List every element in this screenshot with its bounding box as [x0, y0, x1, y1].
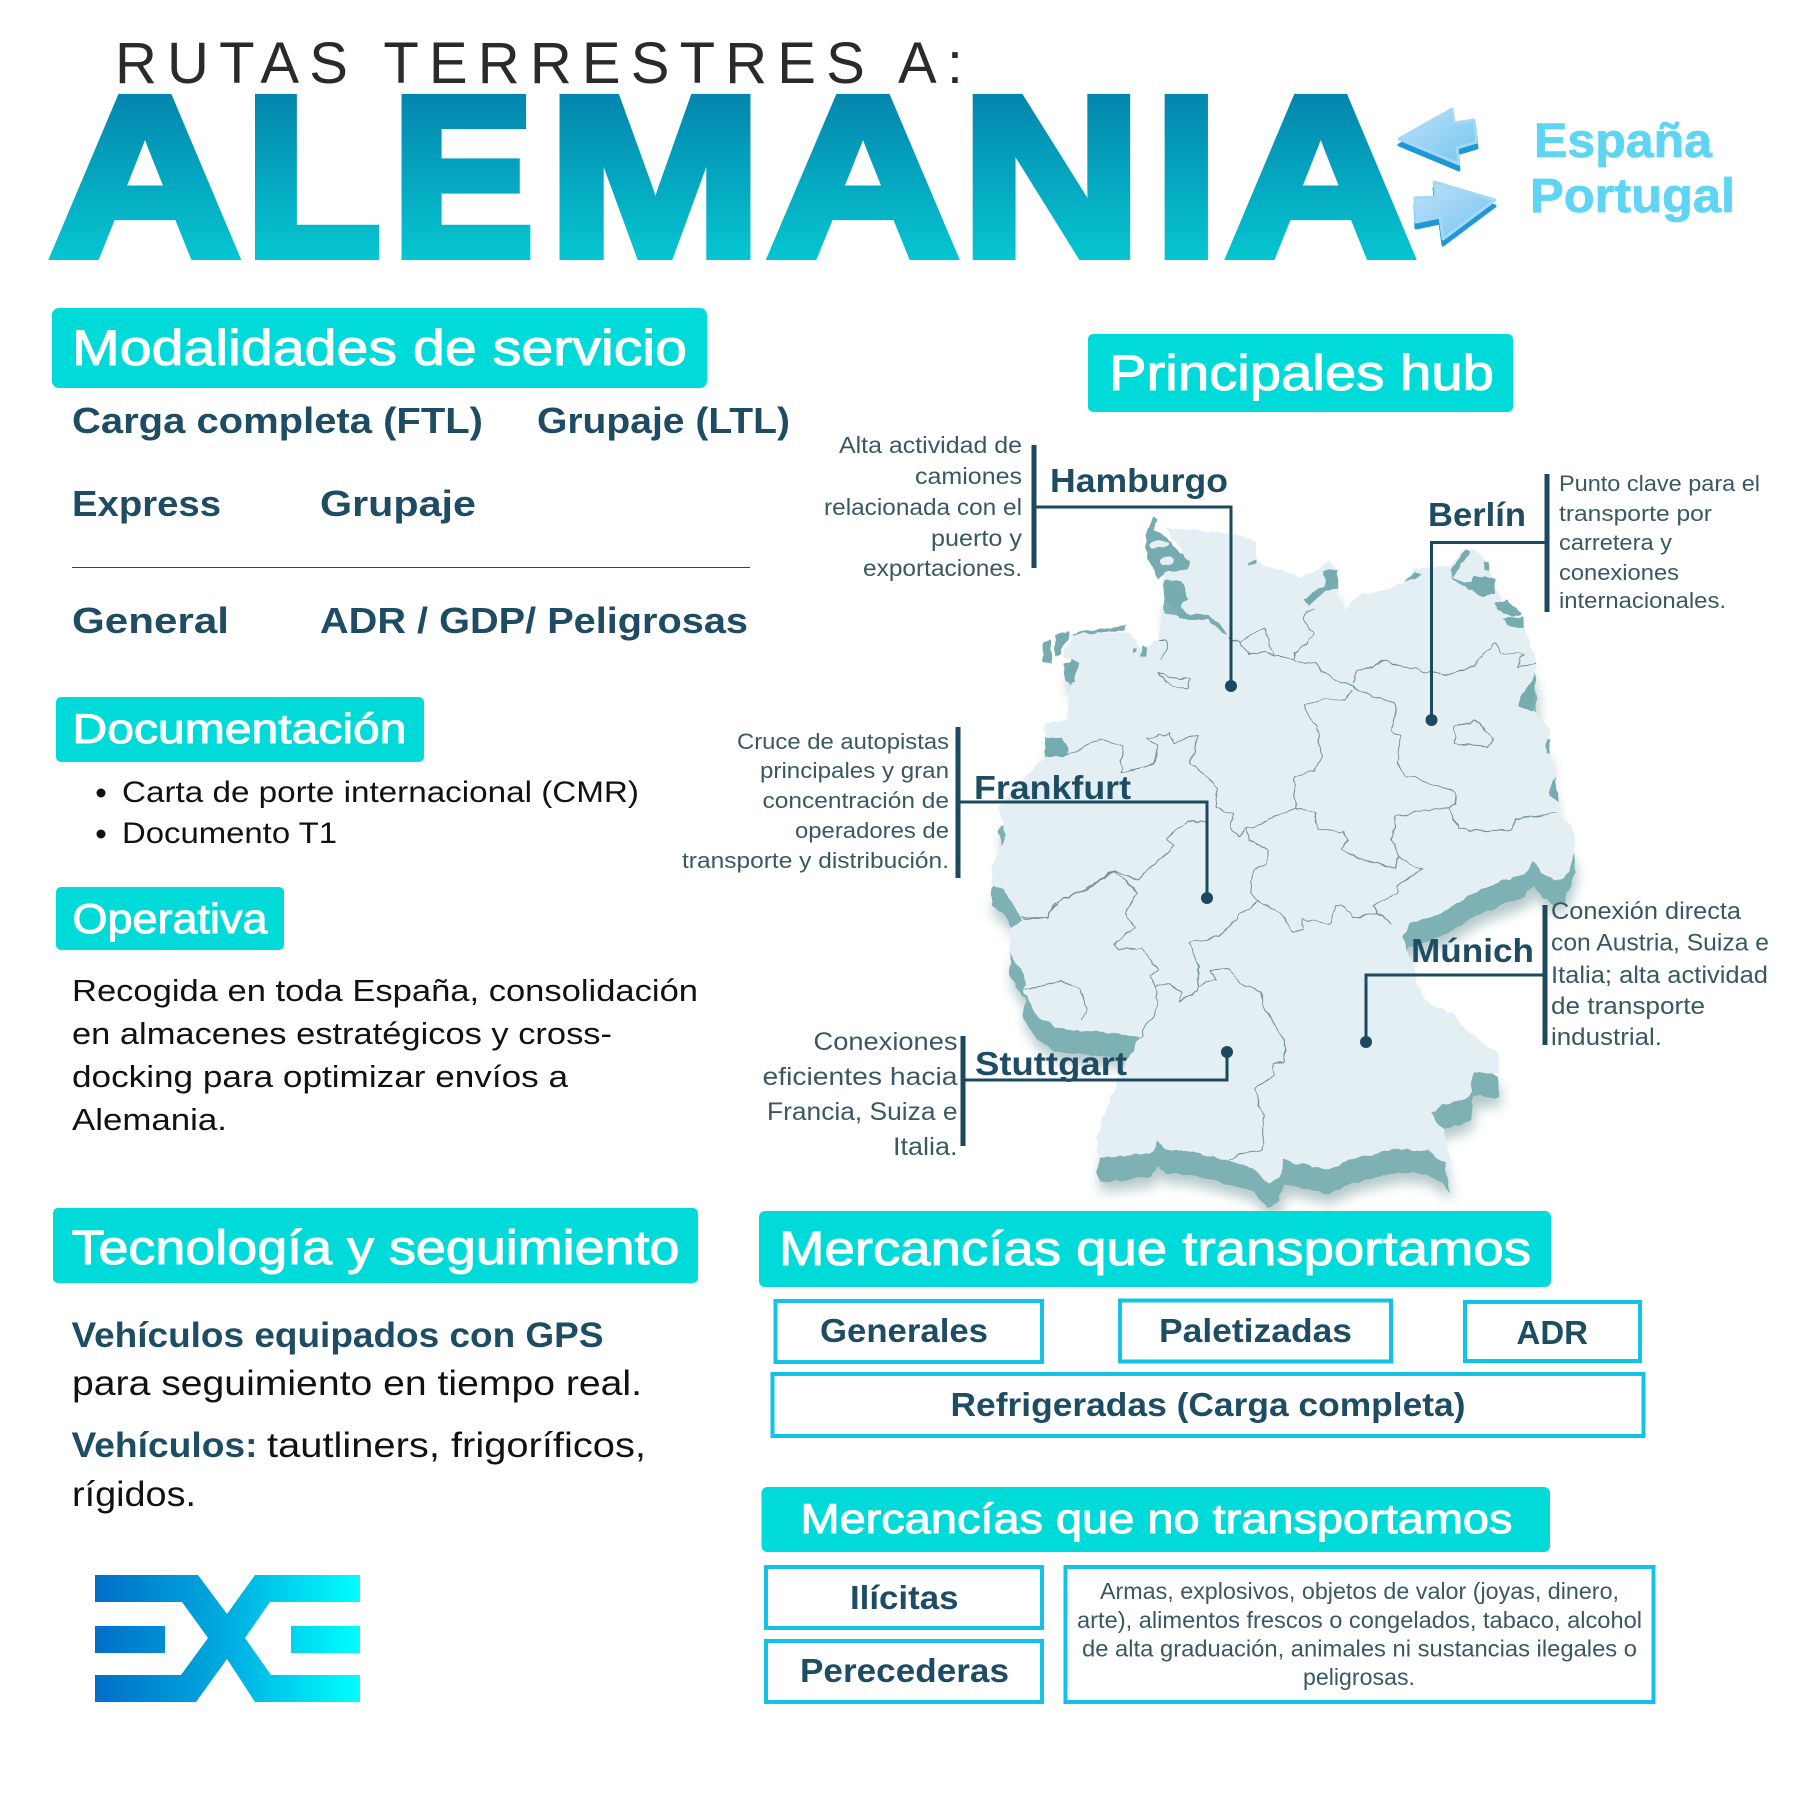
callout: Múnich [1360, 898, 1769, 1051]
callout: Stuttgart: Stuttgart [975, 1045, 1127, 1082]
callout: Múnich: Múnich [1411, 932, 1534, 969]
callout: Stuttgart [762, 1028, 1233, 1161]
heading: documentación [56, 697, 424, 762]
tag: perecederas [766, 1641, 1042, 1702]
callout: Hamburgo: puerto y [931, 525, 1023, 551]
callout: Frankfurt: Frankfurt [974, 769, 1131, 806]
panel: modalidades de servicio [52, 308, 790, 641]
callout: Hamburgo: Hamburgo [1050, 462, 1228, 499]
tag: refrigeradas: Refrigeradas (Carga completa) [950, 1386, 1466, 1423]
map shadow [994, 562, 1577, 1217]
map of Germany [992, 517, 1577, 1217]
callout: Frankfurt: transporte y distribución. [682, 848, 949, 873]
title: Alemania: L [245, 51, 381, 304]
tag: paletizadas [1120, 1300, 1391, 1362]
heading: modalidades: Modalidades de servicio [72, 320, 687, 376]
heading: operativa [56, 887, 284, 950]
tag: refrigeradas [772, 1374, 1644, 1436]
heading: principales hub [1088, 334, 1513, 412]
text: tiempo real: para seguimiento en tiempo real. [72, 1364, 642, 1403]
title: Alemania: A [50, 51, 240, 304]
callout: Múnich: industrial. [1551, 1024, 1662, 1051]
tag: generales [776, 1301, 1042, 1362]
tag: paletizadas: Paletizadas [1159, 1312, 1352, 1349]
title: Alemania: N [962, 51, 1142, 304]
callout: Frankfurt: concentración de [762, 788, 949, 813]
service: express: Express [72, 483, 221, 524]
tag: ilícitas: Ilícitas [850, 1579, 958, 1616]
paragraph: operativa: docking para optimizar envíos a [72, 1059, 569, 1094]
service: carga completa: Carga completa (FTL) [72, 400, 483, 441]
service: grupaje LTL: Grupaje (LTL) [537, 400, 790, 441]
callout: Berlín [1426, 471, 1760, 726]
callout: Hamburgo: Alta actividad de [839, 432, 1022, 458]
service: general: General [72, 600, 229, 641]
callout: Múnich: de transporte [1551, 993, 1705, 1020]
heading: transportamos [759, 1211, 1551, 1287]
callout: Frankfurt: principales y gran [760, 758, 949, 783]
text: vehículos bold: Vehículos: [72, 1426, 258, 1465]
list item: T1: Documento T1 [122, 817, 337, 850]
text: GPS: Vehículos equipados con GPS [72, 1316, 604, 1355]
callout: Berlín: conexiones [1559, 560, 1679, 585]
panel: documentación [56, 697, 639, 850]
box: excluded goods [1066, 1567, 1654, 1702]
service: grupaje: Grupaje [320, 483, 476, 524]
service: ADR: ADR / GDP/ Peligrosas [320, 600, 748, 641]
text: rígidos: rígidos. [72, 1475, 196, 1514]
heading: tecnología: Tecnología y seguimiento [72, 1222, 680, 1275]
heading: principales hub: Principales hub [1109, 345, 1494, 401]
label: España: España [1534, 115, 1712, 168]
title: Alemania: A [768, 51, 958, 304]
callout: Hamburgo: camiones [915, 463, 1022, 489]
callout: Berlín: carretera y [1559, 530, 1672, 555]
tag: generales: Generales [820, 1312, 988, 1349]
callout: Frankfurt [682, 727, 1213, 904]
tag: ADR: ADR [1516, 1314, 1588, 1351]
heading: operativa: Operativa [72, 895, 268, 942]
callout: Stuttgart: Italia. [893, 1133, 958, 1161]
tag: perecederas: Perecederas [800, 1652, 1009, 1689]
callout: Stuttgart: Francia, Suiza e [767, 1098, 958, 1126]
list item: CMR: Carta de porte internacional (CMR) [122, 776, 639, 809]
panel: mercancías que transportamos [759, 1211, 1644, 1436]
callout: Frankfurt: Cruce de autopistas [737, 729, 949, 754]
title: Alemania: E [392, 51, 534, 304]
tag: ilícitas [766, 1567, 1042, 1628]
panel: operativa [56, 887, 698, 1137]
paragraph: operativa: Recogida en toda España, consolidación [72, 973, 698, 1008]
text: tipos de vehículos: tautliners, frigoríficos, [267, 1426, 646, 1465]
icon: arrow towards left [1399, 109, 1477, 170]
title: rutas terrestres: RUTAS TERRESTRES A: [115, 31, 963, 96]
panel: mercancías que no transportamos [762, 1487, 1654, 1702]
title: Alemania: M [548, 51, 762, 304]
callout: Stuttgart: Conexiones [814, 1028, 958, 1056]
state borders, south [1023, 870, 1284, 1160]
callout: Múnich: Italia; alta actividad [1551, 962, 1768, 989]
heading: tecnología [53, 1208, 698, 1283]
title: Alemania: A [1226, 51, 1416, 304]
callout: Berlín: Berlín [1428, 496, 1526, 533]
icon: arrow towards right [1415, 182, 1495, 245]
box: excluded goods: arte), alimentos frescos o congelados, tabaco, alcohol [1077, 1607, 1642, 1633]
label: Portugal: Portugal [1530, 170, 1735, 223]
tag: ADR [1465, 1302, 1640, 1361]
callout: Hamburgo: relacionada con el [824, 494, 1022, 520]
heading: documentación: Documentación [72, 705, 406, 752]
paragraph: operativa [72, 973, 698, 1137]
map relief and surface [992, 517, 1575, 1207]
title: Alemania: I [1154, 51, 1218, 304]
callout: Múnich: Conexión directa [1551, 898, 1742, 925]
callout: Frankfurt: operadores de [795, 818, 949, 843]
box: excluded goods: de alta graduación, animales ni sustancias ilegales o [1082, 1636, 1637, 1662]
paragraph: operativa: Alemania. [72, 1102, 227, 1137]
map top surface [992, 528, 1575, 1183]
callout: Berlín: transporte por [1559, 501, 1712, 526]
box: excluded goods: Armas, explosivos, objetos de valor (joyas, dinero, [1100, 1578, 1619, 1604]
paragraph: operativa: en almacenes estratégicos y cross- [72, 1016, 612, 1051]
callout: Hamburgo: exportaciones. [863, 555, 1022, 581]
heading: modalidades [52, 308, 707, 388]
panel: tecnología y seguimiento [53, 1208, 698, 1514]
map extrusion [992, 552, 1575, 1207]
box: excluded goods: peligrosas. [1303, 1664, 1415, 1690]
callout: Berlín: internacionales. [1559, 588, 1726, 613]
callout: Stuttgart: eficientes hacia [762, 1063, 958, 1091]
logo EXE [95, 1575, 360, 1702]
heading: no transportamos: Mercancías que no transportamos [800, 1495, 1512, 1542]
state borders, north [1020, 608, 1558, 932]
callout: Berlín: Punto clave para el [1559, 471, 1760, 496]
heading: transportamos: Mercancías que transportamos [779, 1223, 1531, 1276]
callout: Múnich: con Austria, Suiza e [1551, 930, 1769, 956]
heading: no transportamos [762, 1487, 1550, 1552]
coastal water and islands, north [1043, 517, 1558, 802]
callout: Hamburgo [824, 432, 1237, 692]
